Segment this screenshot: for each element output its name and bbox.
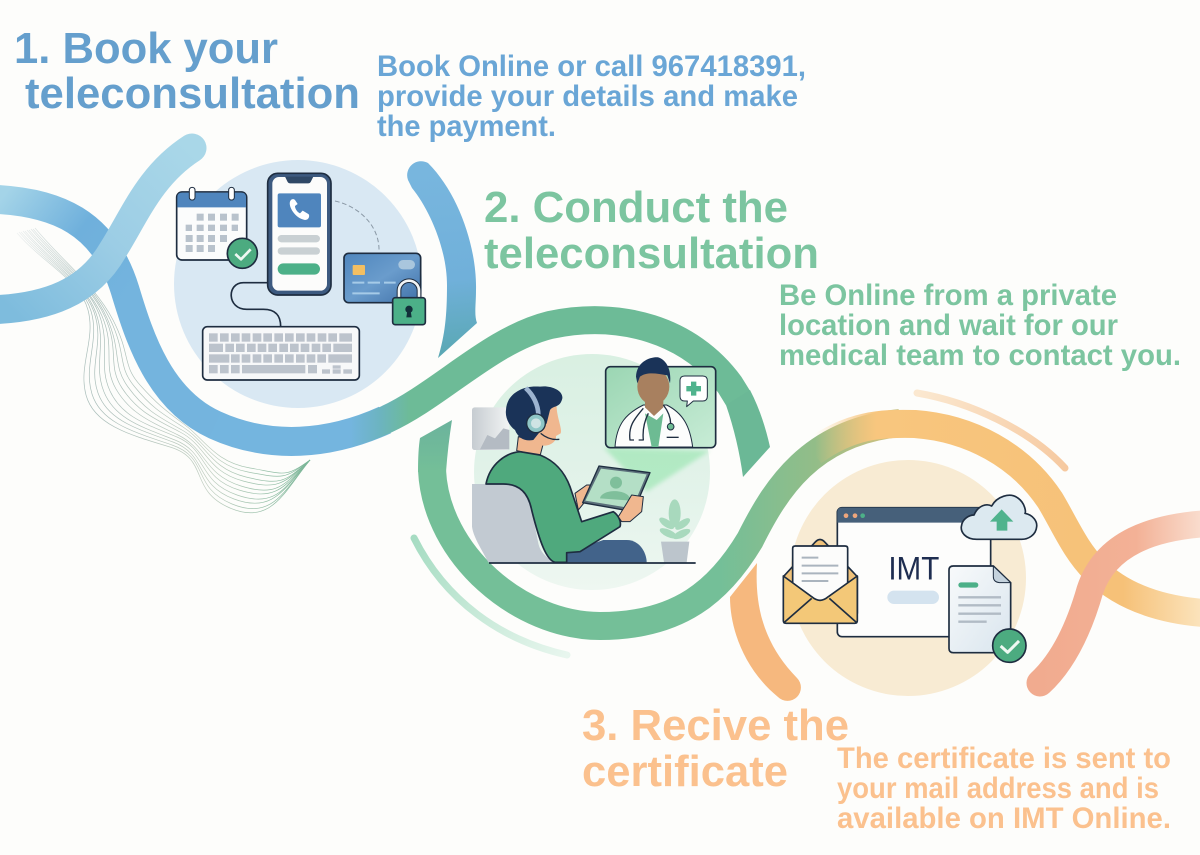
ribbon: blue arc right of step 1 <box>407 161 477 358</box>
icon: keyboard <box>203 327 359 380</box>
icon: connecting cable <box>231 283 281 327</box>
step 1 heading: 1. Book your <box>14 24 278 73</box>
step 3 heading <box>582 701 849 796</box>
icon: envelope <box>783 539 857 623</box>
ribbon: light blue crossing <box>0 148 192 310</box>
circle: step 2 backdrop <box>474 354 710 590</box>
circle: step 3 backdrop <box>790 460 1026 696</box>
step 3 description <box>837 742 1171 835</box>
step 1 heading: teleconsultation <box>25 69 360 118</box>
icon: credit card <box>344 253 421 303</box>
icon: tablet <box>583 466 650 522</box>
label: IMT: IMT <box>888 550 939 586</box>
step 2 description: Be Online from a private <box>779 279 1117 312</box>
icon: wall picture <box>472 407 509 450</box>
doctor video panel <box>606 357 716 448</box>
step 1 description: provide your details and make <box>377 80 798 113</box>
icon: smartphone <box>268 173 331 295</box>
fine wave lines <box>17 228 310 513</box>
illustration: video consultation <box>472 357 716 563</box>
accent arc: faint orange <box>917 393 1065 468</box>
step 2 description: medical team to contact you. <box>779 339 1181 372</box>
ribbon: orange left arc <box>730 563 801 701</box>
step 2 heading: 2. Conduct the <box>484 183 788 232</box>
icon: plant <box>657 499 692 562</box>
step 1 description: Book Online or call 967418391, <box>377 50 806 83</box>
step 2 description <box>779 279 1181 372</box>
icon: calendar <box>177 187 257 268</box>
illustration: certificate delivery <box>783 495 1037 662</box>
step 3 heading: certificate <box>582 747 788 796</box>
step 2 heading: teleconsultation <box>484 229 819 278</box>
icon: armchair <box>472 484 555 562</box>
ribbon: blue from left turning green <box>0 199 770 477</box>
floor line <box>489 560 696 565</box>
accent arc: faint green <box>414 538 567 655</box>
icon: document <box>949 566 1026 662</box>
step 2 heading <box>484 183 819 278</box>
step 1 description: the payment. <box>377 110 556 143</box>
illustration: booking devices <box>177 173 425 380</box>
circle: step 1 backdrop <box>174 160 422 408</box>
ribbon: green arc under step 2 <box>418 420 900 626</box>
ribbon: orange around step 3 <box>813 424 1200 614</box>
step 2 description: location and wait for our <box>779 309 1118 342</box>
step 3 description: The certificate is sent to <box>837 742 1171 775</box>
step 3 heading: 3. Recive the <box>582 701 849 750</box>
step 3 description: your mail address and is <box>837 772 1159 805</box>
icon: browser window <box>837 508 991 637</box>
step 1 description <box>377 50 806 143</box>
step 1 heading <box>14 24 360 118</box>
patient figure <box>486 386 647 562</box>
icon: padlock <box>393 281 425 325</box>
green video beam <box>603 447 710 492</box>
step 3 description: available on IMT Online. <box>837 802 1171 835</box>
icon: dashed link <box>335 201 379 252</box>
ribbon: salmon crossing <box>1040 523 1200 683</box>
icon: upload cloud <box>961 495 1037 539</box>
